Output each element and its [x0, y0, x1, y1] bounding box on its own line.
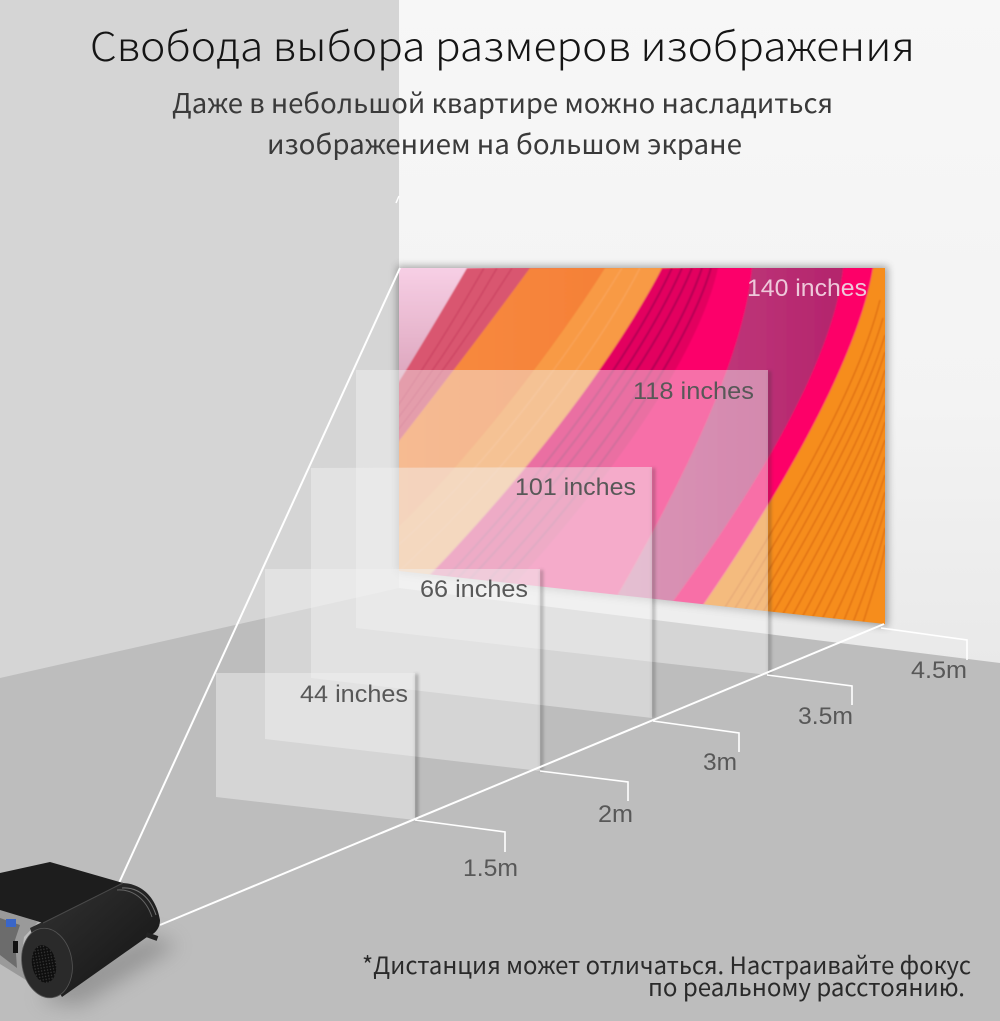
- distance marker: 3m: [653, 721, 739, 776]
- size label: 66 inches: 66 inches: [420, 576, 528, 603]
- footnote: по реальному расстоянию.: [648, 968, 965, 1003]
- distance marker: 2m: 2m: [598, 801, 633, 828]
- size label: 140 inches: 140 inches: [747, 275, 867, 302]
- size label: 44 inches: 44 inches: [300, 681, 408, 708]
- subtitle: [172, 82, 833, 162]
- title: Свобода выбора размеров изображения: [90, 15, 915, 73]
- icon: projector: [0, 862, 178, 1006]
- distance marker: 3.5m: 3.5m: [798, 703, 853, 730]
- projection beam lines: [119, 196, 884, 925]
- 44 inch panel: [216, 673, 418, 820]
- subtitle: Даже в небольшой квартире можно насладиться: [172, 82, 833, 121]
- size label: 101 inches: 101 inches: [515, 474, 636, 501]
- distance marker: 2m: [540, 771, 633, 828]
- distance marker: 1.5m: 1.5m: [463, 855, 518, 882]
- 66 inch panel: [265, 569, 543, 771]
- distance marker: 4.5m: 4.5m: [911, 657, 967, 684]
- distance marker: 3.5m: [767, 675, 853, 730]
- 118 inch panel: [356, 370, 771, 675]
- subtitle: изображением на большом экране: [267, 123, 742, 162]
- distance marker: 4.5m: [881, 628, 967, 684]
- distance marker: 3m: 3m: [703, 749, 737, 776]
- 140 inch projected image: [395, 260, 900, 640]
- distance marker: 1.5m: [415, 820, 518, 882]
- footnote: [362, 946, 971, 1003]
- size label: 118 inches: 118 inches: [633, 378, 754, 405]
- 101 inch panel: [311, 467, 655, 718]
- footnote: *Дистанция может отличаться. Настраивайте фокус: [362, 946, 971, 981]
